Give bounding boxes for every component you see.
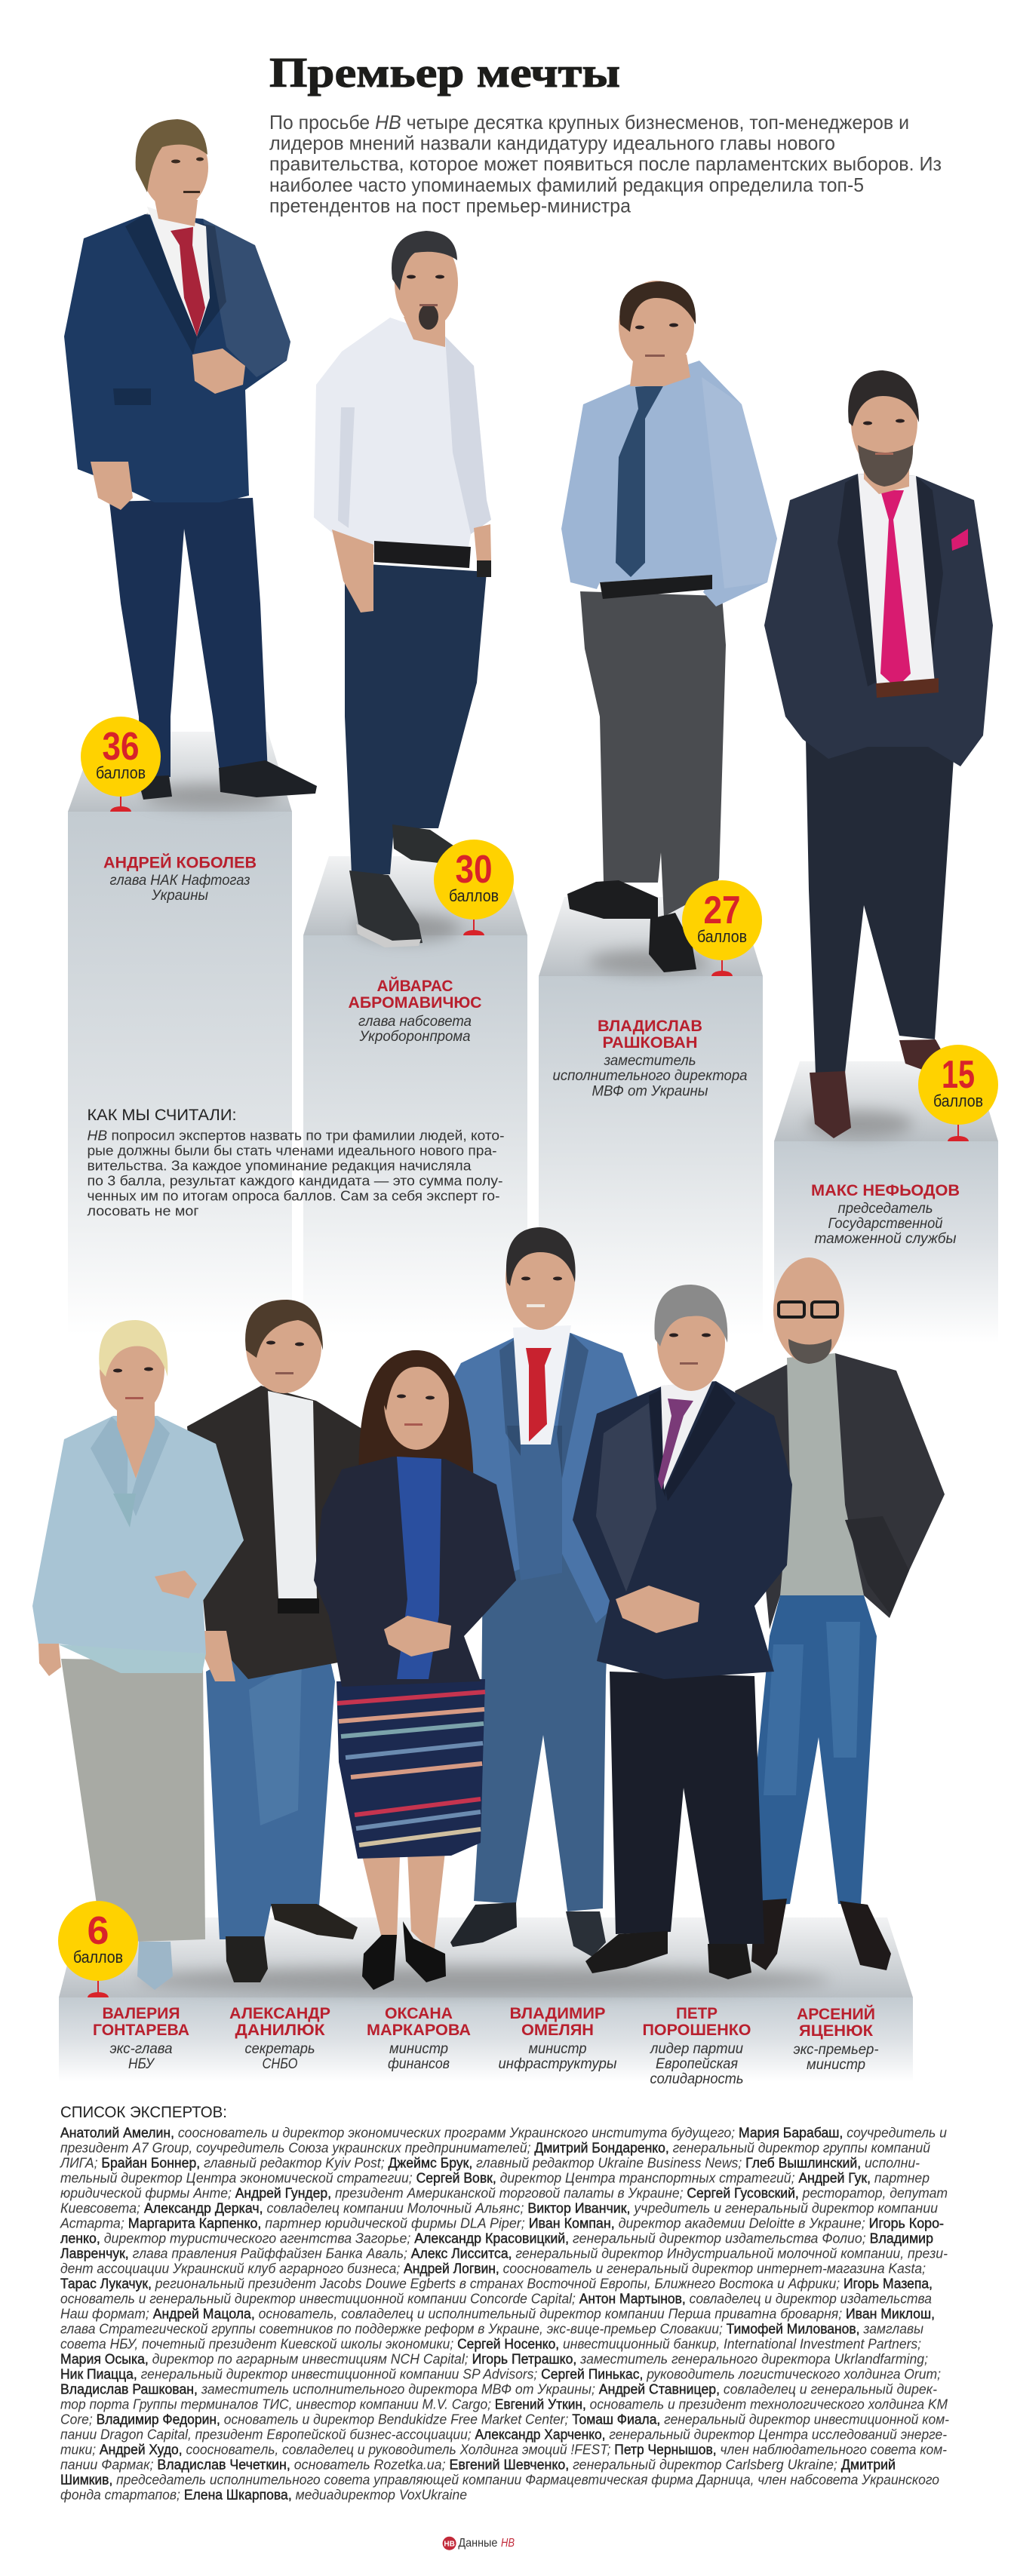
label: Владимир Омелян <box>498 2005 617 2072</box>
intro text: наиболее часто упоминаемых фамилий редакция определила топ-5 <box>269 173 864 196</box>
label: Оксана Маркарова: ОКСАНА <box>385 2005 453 2022</box>
circle: 30 баллов: 30 <box>456 848 492 892</box>
label: Макс Нефьодов: МАКС НЕФЬОДОВ <box>811 1182 960 1199</box>
label: Арсений Яценюк: ЯЦЕНЮК <box>799 2022 873 2040</box>
podium 5 <box>59 1917 913 2082</box>
circle: 15 баллов <box>918 1045 998 1141</box>
circle: 30 баллов <box>434 840 514 935</box>
label: Петр Порошенко <box>643 2005 751 2087</box>
experts list: президент A7 Group, соучредитель Союза украинских предпринимателей; Дмитрий Бондаренко, генеральный директор группы компаний <box>60 2140 930 2155</box>
label: Айварас Абромавичюс <box>349 977 481 1045</box>
label: Макс Нефьодов: Государственной <box>828 1216 943 1232</box>
label: Александр Данилюк: СНБО <box>263 2056 298 2072</box>
experts list: тики; Андрей Худо, соосноватeль, совладелец и руководитель Холдинга эмоций !FEST; Петр Чернышов, член наблюдательного совета ком- <box>60 2442 947 2457</box>
label: Макс Нефьодов: председатель <box>837 1201 933 1217</box>
label: Владимир Омелян: инфраструктуры <box>498 2056 617 2072</box>
label: Макс Нефьодов <box>811 1182 960 1247</box>
experts list: Шимкив, председатель исполнительного совета управляющей компании Фармацевтическая фирма Дарница, член набсовета Украинского <box>60 2472 939 2487</box>
label: Петр Порошенко: солидарность <box>650 2071 744 2087</box>
label: Владислав Рашкован: исполнительного директора <box>552 1068 747 1084</box>
circle: 6 баллов: 6 <box>88 1909 109 1953</box>
label: Владимир Омелян: министр <box>528 2041 587 2057</box>
circle: 27 баллов <box>682 880 762 976</box>
footer source: Данные <box>458 2537 497 2550</box>
experts list: пании Фармак; Владислав Чечеткин, основатель Rozetka.ua; Евгений Шевченко, генеральный директор Carlsberg Ukraine; Дмитрий <box>60 2457 896 2472</box>
experts list: фонда стартапов; Елена Шкарпова, медиадиректор VoxUkraine <box>60 2487 467 2502</box>
experts list: тельный директор Центра экономической стратегии; Сергей Вовк, директор Центра транспортных стратегий; Андрей Гук, партнер <box>60 2170 930 2185</box>
circle: 30 баллов: баллов <box>449 886 499 905</box>
label: Валерия Гонтарева: экс-глава <box>110 2041 172 2057</box>
label: Владимир Омелян: ОМЕЛЯН <box>521 2022 594 2039</box>
person: Андрей Коболев <box>64 119 317 800</box>
label: Валерия Гонтарева <box>93 2005 189 2072</box>
label: Александр Данилюк <box>229 2005 330 2072</box>
person: Арсений Яценюк <box>735 1257 945 1970</box>
experts list: Мария Осыка, директор по аграрным инвестициям NCH Capital; Игорь Петрашко, заместитель генерального директора Ukrlandfarming; <box>60 2351 928 2366</box>
person: Петр Порошенко <box>573 1285 792 1979</box>
experts list: совета НБУ, почетный президент Киевской школы экономики; Сергей Носенко, инвестиционный банкир, International Investment Partners; <box>60 2336 921 2351</box>
experts list: Лавренчук, глава правления Райффайзен Банка Аваль; Алекс Лисситса, генеральный директор Индустриальной молочной компании, прези- <box>60 2246 948 2261</box>
person: Александр Данилюк <box>187 1300 370 1982</box>
circle: 36 баллов: баллов <box>96 763 146 782</box>
label: Оксана Маркарова <box>367 2005 471 2072</box>
experts list: Наш формат; Андрей Мацола, основатель, совладелец и исполнительный директор компании Перша приватна броварня; Иван Миклош, <box>60 2306 935 2321</box>
experts list heading: СПИСОК ЭКСПЕРТОВ: <box>60 2104 227 2121</box>
experts list: ленко, директор туристического агентства Загорье; Александр Красовицкий, генеральный директор издательства Фолио; Владимир <box>60 2231 933 2246</box>
experts list: Киевсовета; Александр Деркач, совладелец компании Молочный Альянс; Виктор Иванчик, учредитель и генеральный директор компании <box>60 2200 938 2215</box>
label: Оксана Маркарова: МАРКАРОВА <box>367 2022 471 2039</box>
experts list: глава Стратегической группы советников по поддержке реформ в Украине, экс-вице-премьер Словакии; Тимофей Милованов, замглавы <box>60 2321 923 2336</box>
label: Оксана Маркарова: финансов <box>388 2056 450 2072</box>
person: Макс Нефьодов <box>764 370 993 1138</box>
circle: 15 баллов: 15 <box>942 1053 975 1097</box>
circle: 36 баллов: 36 <box>103 725 139 769</box>
label: Айварас Абромавичюс: АБРОМАВИЧЮС <box>349 994 481 1012</box>
label: Владислав Рашкован: РАШКОВАН <box>602 1034 697 1052</box>
label: Владислав Рашкован: МВФ от Украины <box>592 1083 708 1100</box>
experts list: тор порта Группы терминалов ТИС, инвестор компании M.V. Cargo; Евгений Уткин, основатель и президент технологического холдинга KM <box>60 2396 948 2412</box>
label: Валерия Гонтарева: ВАЛЕРИЯ <box>103 2005 180 2022</box>
label: Андрей Коболев <box>103 854 257 904</box>
label: Владислав Рашкован <box>552 1018 747 1100</box>
label: Андрей Коболев: АНДРЕЙ КОБОЛЕВ <box>103 854 257 872</box>
how we counted: рые должны были бы стать членами идеального нового пра- <box>88 1143 496 1159</box>
intro text <box>269 111 942 216</box>
footer source: НВ <box>501 2537 515 2550</box>
how we counted: по 3 балла, результат каждого кандидата — это сумма полу- <box>88 1173 502 1189</box>
title: Премьер мечты <box>269 50 620 97</box>
experts list: ЛИГА; Брайан Боннер, главный редактор Kyiv Post; Джеймс Брук, главный редактор Ukraine Business News; Глеб Вышлинский, исполни- <box>60 2155 920 2170</box>
label: Арсений Яценюк: АРСЕНИЙ <box>797 2005 875 2023</box>
label: Валерия Гонтарева: ГОНТАРЕВА <box>93 2022 189 2039</box>
how we counted <box>88 1107 504 1219</box>
how we counted: КАК МЫ СЧИТАЛИ: <box>88 1107 237 1124</box>
label: Владислав Рашкован: заместитель <box>604 1053 696 1069</box>
experts list: Core; Владимир Федорин, основатель и директор Bendukidze Free Market Center; Томаш Фиала, генеральный директор инвестиционной ком- <box>60 2412 949 2427</box>
intro text: По просьбе НВ четыре десятка крупных бизнесменов, топ-менеджеров и <box>269 111 909 134</box>
label: Оксана Маркарова: министр <box>389 2041 448 2057</box>
podium 3 <box>539 897 763 1335</box>
label: Владислав Рашкован: ВЛАДИСЛАВ <box>598 1018 702 1035</box>
podium 2 <box>303 856 527 1335</box>
experts list: Анатолий Амелин, соосноватeль и директор экономических программ Украинского института будущего; Мария Барабаш, соучредитель и <box>60 2125 947 2140</box>
experts list <box>60 2125 949 2502</box>
label: Александр Данилюк: АЛЕКСАНДР <box>229 2005 330 2022</box>
circle: 15 баллов: баллов <box>933 1091 983 1110</box>
label: Айварас Абромавичюс: АЙВАРАС <box>377 977 453 995</box>
foot shadows <box>136 784 913 1994</box>
label: Валерия Гонтарева: НБУ <box>128 2056 155 2072</box>
label: Андрей Коболев: Украины <box>151 888 208 904</box>
label: Петр Порошенко: лидер партии <box>650 2041 743 2057</box>
experts list: дент ассоциации Украинский клуб аграрного бизнеса; Андрей Логвин, соосноватeль и генеральный директор интернет-магазина Kasta; <box>60 2261 926 2276</box>
label: Петр Порошенко: ПЕТР <box>676 2005 718 2022</box>
experts list: основатель и генеральный директор инвестиционной компании Concorde Capital; Антон Мартынов, совладелец и директор издательства <box>60 2291 932 2306</box>
label: Александр Данилюк: ДАНИЛЮК <box>235 2022 325 2039</box>
podium 4 <box>774 1061 998 1343</box>
label: Андрей Коболев: глава НАК Нафтогаз <box>110 873 250 889</box>
intro text: претендентов на пост премьер-министра <box>269 194 631 216</box>
person: Валерия Гонтарева <box>32 1320 244 1990</box>
how we counted: лосовать не мог <box>88 1203 199 1219</box>
circle: 27 баллов: баллов <box>697 927 747 946</box>
how we counted: ченных им по итогам опроса баллов. Сам за себя эксперт го- <box>88 1188 499 1204</box>
experts list: Астарта; Маргарита Карпенко, партнер юридической фирмы DLA Piper; Иван Компан, директор академии Deloitte в Украине; Игорь Коро- <box>60 2215 944 2231</box>
how we counted: вительства. За каждое упоминание редакция начисляла <box>88 1158 472 1174</box>
person: Айварас Абромавичюс <box>314 231 491 947</box>
intro text: лидеров мнений назвали кандидатуру идеального главы нового <box>269 132 835 155</box>
label: Владимир Омелян: ВЛАДИМИР <box>510 2005 605 2022</box>
label: Арсений Яценюк: экс-премьер- <box>794 2042 878 2058</box>
experts list: юридической фирмы Анте; Андрей Гундер, президент Американской торговой палаты в Украине; Сергей Гусовский, ресторатор, депутат <box>60 2185 948 2200</box>
label: Макс Нефьодов: таможенной службы <box>815 1231 957 1247</box>
podium 1 <box>68 732 292 1335</box>
footer source: НВ <box>444 2541 455 2548</box>
experts list: пании Dragon Capital, президент Европейской бизнес-ассоциации; Александр Харченко, генеральный директор Центра исследований энерге- <box>60 2427 947 2442</box>
experts list: Владислав Рашкован, заместитель исполнительного директора МВФ от Украины; Андрей Ставницер, совладелец и генеральный дирек- <box>60 2381 937 2396</box>
circle: 6 баллов: баллов <box>73 1948 123 1967</box>
person: Владимир Омелян <box>450 1227 638 1957</box>
label: Александр Данилюк: секретарь <box>244 2041 315 2057</box>
person: Оксана Маркарова <box>314 1350 516 1990</box>
circle: 27 баллов: 27 <box>703 889 741 932</box>
label: Айварас Абромавичюс: Укроборонпрома <box>359 1029 471 1045</box>
label: Петр Порошенко: Европейская <box>656 2056 738 2072</box>
intro text: правительства, которое может появиться после парламентских выборов. Из <box>269 152 942 175</box>
label: Петр Порошенко: ПОРОШЕНКО <box>643 2022 751 2039</box>
experts list: Ник Пиацца, генеральный директор инвестиционной компании SP Advisors; Сергей Пинькас, руководитель логистического холдинга Orum; <box>60 2366 941 2381</box>
circle: 36 баллов <box>81 717 161 812</box>
label: Арсений Яценюк <box>794 2005 878 2073</box>
label: Айварас Абромавичюс: глава набсовета <box>358 1014 472 1030</box>
label: Арсений Яценюк: министр <box>807 2057 865 2073</box>
circle: 6 баллов <box>58 1901 138 1997</box>
how we counted: НВ попросил экспертов назвать по три фамилии людей, кото- <box>88 1128 504 1144</box>
experts list: Тарас Лукачук, региональный президент Jacobs Douwe Egberts в странах Восточной Европы, Ближнего Востока и Африки; Игорь Мазепа, <box>60 2276 933 2291</box>
person: Владислав Рашкован <box>561 281 777 972</box>
footer source <box>443 2537 515 2550</box>
